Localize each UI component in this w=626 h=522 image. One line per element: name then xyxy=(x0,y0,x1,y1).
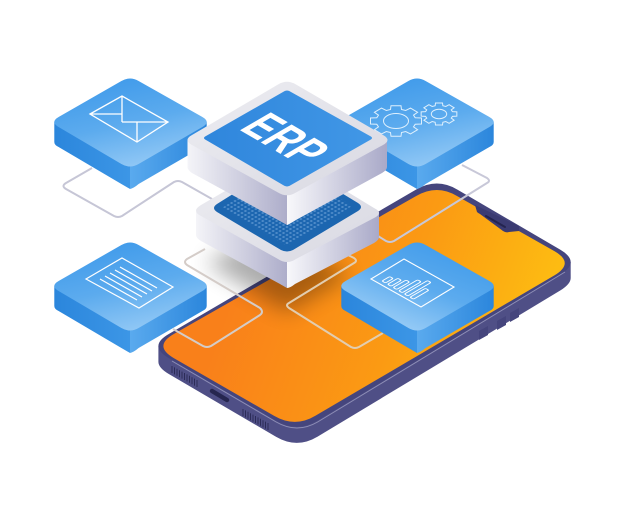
block: chart xyxy=(341,242,494,353)
rim highlight xyxy=(172,272,565,428)
processor chip xyxy=(214,160,361,252)
block body xyxy=(341,242,494,353)
speaker grille left xyxy=(172,366,197,387)
block body xyxy=(341,78,494,189)
block side left xyxy=(54,122,130,189)
lower layer top xyxy=(196,155,379,262)
connector: ERP to mail xyxy=(64,168,212,217)
ERP server stack xyxy=(188,82,388,288)
speaker grille right xyxy=(243,409,268,430)
phone body side xyxy=(158,262,571,443)
block: mail xyxy=(54,78,207,189)
notch xyxy=(475,205,519,232)
side buttons xyxy=(479,308,519,340)
block: gears xyxy=(341,78,494,189)
connector lines xyxy=(64,165,489,348)
charging port xyxy=(212,391,227,400)
block top xyxy=(54,78,207,166)
block body xyxy=(54,242,207,353)
ERP panel xyxy=(204,90,372,186)
chip dots xyxy=(222,165,352,246)
connector: ERP to chart xyxy=(287,255,383,348)
connector: ERP to gears xyxy=(378,165,489,242)
notch speaker xyxy=(486,216,505,227)
icon: bar chart xyxy=(371,259,454,307)
block side right xyxy=(130,122,207,189)
shadow under ERP server xyxy=(205,232,350,312)
icon: large gear xyxy=(370,106,422,136)
phone screen xyxy=(163,190,565,422)
phone top face rim xyxy=(158,184,571,427)
ERP label: ERP xyxy=(228,106,341,172)
icon: small gear xyxy=(421,103,457,125)
block: document xyxy=(54,242,207,353)
icon: document xyxy=(86,258,173,308)
icon: envelope xyxy=(90,96,168,142)
upper layer top xyxy=(188,82,388,195)
lower layer sides xyxy=(196,212,287,288)
upper layer sides xyxy=(188,140,287,225)
connector: ERP to document xyxy=(173,249,262,347)
phone xyxy=(158,184,571,443)
